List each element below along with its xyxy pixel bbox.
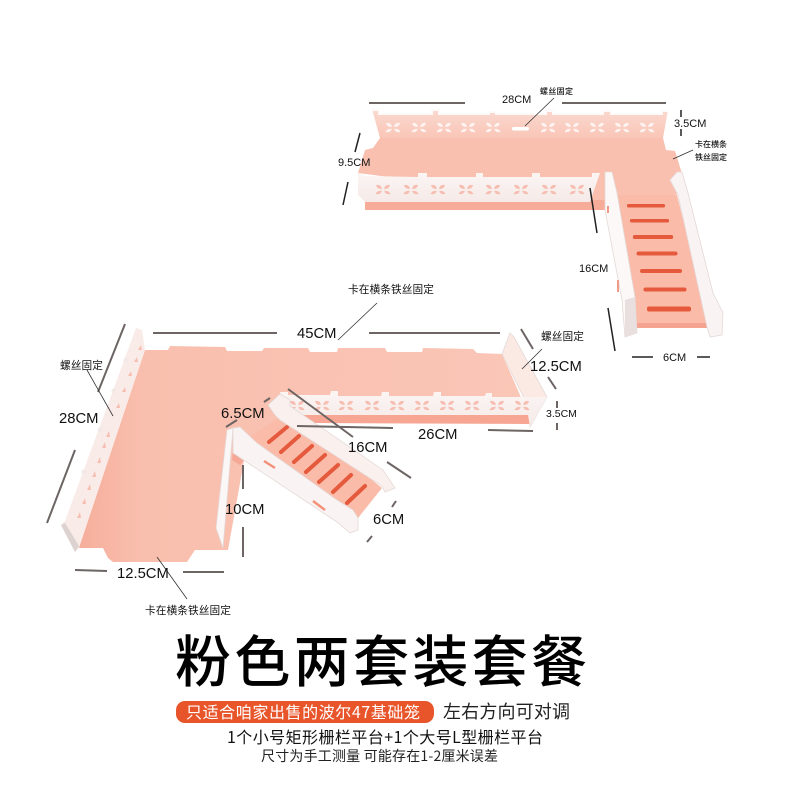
product: large L-shaped platform with ramp bbox=[61, 328, 547, 562]
fixing notes: large platform: 卡在横条铁丝固定 bbox=[145, 603, 231, 618]
fixing notes: large platform: 螺丝固定 bbox=[60, 358, 103, 373]
package contents: 1个小号矩形栅栏平台+1个大号L型栅栏平台 bbox=[227, 724, 543, 748]
fixing notes: small platform: 螺丝固定 bbox=[540, 86, 573, 97]
dimension labels: large platform: 6.5CM bbox=[221, 406, 265, 422]
fixing notes: large platform: 螺丝固定 bbox=[541, 329, 584, 344]
dimension labels: large platform: 6CM bbox=[373, 512, 404, 528]
title: 粉色两套装套餐 bbox=[175, 618, 587, 699]
large ramp bbox=[233, 394, 395, 533]
fixing notes: small platform: 铁丝固定 bbox=[695, 152, 727, 163]
fixing notes: small platform bbox=[540, 86, 727, 163]
fixing notes: large platform: 卡在横条铁丝固定 bbox=[348, 282, 434, 297]
large ramp slots bbox=[269, 427, 365, 503]
dimension labels: small platform: 6CM bbox=[663, 352, 686, 364]
small platform back wall bbox=[372, 109, 668, 138]
dimension labels: large platform: 26CM bbox=[418, 427, 457, 443]
large platform inner wall bbox=[216, 428, 233, 548]
dimension labels: small platform: 9.5CM bbox=[338, 157, 370, 169]
note: reversible direction: 左右方向可对调 bbox=[443, 698, 570, 724]
dimension labels: small platform: 3.5CM bbox=[674, 118, 706, 130]
product: small rectangular platform with ramp bbox=[358, 109, 723, 337]
dimension labels: large platform: 45CM bbox=[297, 326, 336, 342]
fixing notes: large platform bbox=[60, 282, 584, 618]
ramp slots bbox=[627, 204, 691, 312]
dimension labels: small platform: 28CM bbox=[502, 94, 531, 106]
dimension labels: small platform bbox=[338, 94, 706, 364]
dimension labels: large platform: 12.5CM bbox=[530, 359, 582, 375]
dimension labels: small platform: 16CM bbox=[579, 263, 608, 275]
dimension labels: large platform: 10CM bbox=[225, 502, 264, 518]
small platform front edge bbox=[365, 200, 606, 210]
large platform front edge bbox=[300, 414, 532, 424]
dimension labels: large platform: 28CM bbox=[59, 411, 98, 427]
small platform floor bbox=[358, 138, 688, 205]
small ramp bbox=[605, 172, 723, 337]
fixing notes: small platform: 卡在横条 bbox=[695, 139, 727, 150]
large platform left wall bbox=[61, 328, 145, 552]
badge: cage compatibility: 只适合咱家出售的波尔47基础笼 bbox=[186, 699, 420, 723]
large platform right wall bbox=[502, 333, 547, 427]
dimension labels: large platform: 3.5CM bbox=[546, 408, 577, 420]
dimension labels: large platform: 16CM bbox=[348, 440, 387, 456]
large platform front wall bbox=[280, 391, 547, 427]
dimension labels: large platform: 12.5CM bbox=[117, 566, 169, 582]
large platform floor bbox=[78, 346, 530, 562]
dimension lines bbox=[47, 98, 710, 599]
small platform front wall bbox=[358, 173, 600, 202]
dimension labels: large platform bbox=[59, 326, 582, 582]
measurement disclaimer: 尺寸为手工测量 可能存在1-2厘米误差 bbox=[261, 746, 498, 766]
